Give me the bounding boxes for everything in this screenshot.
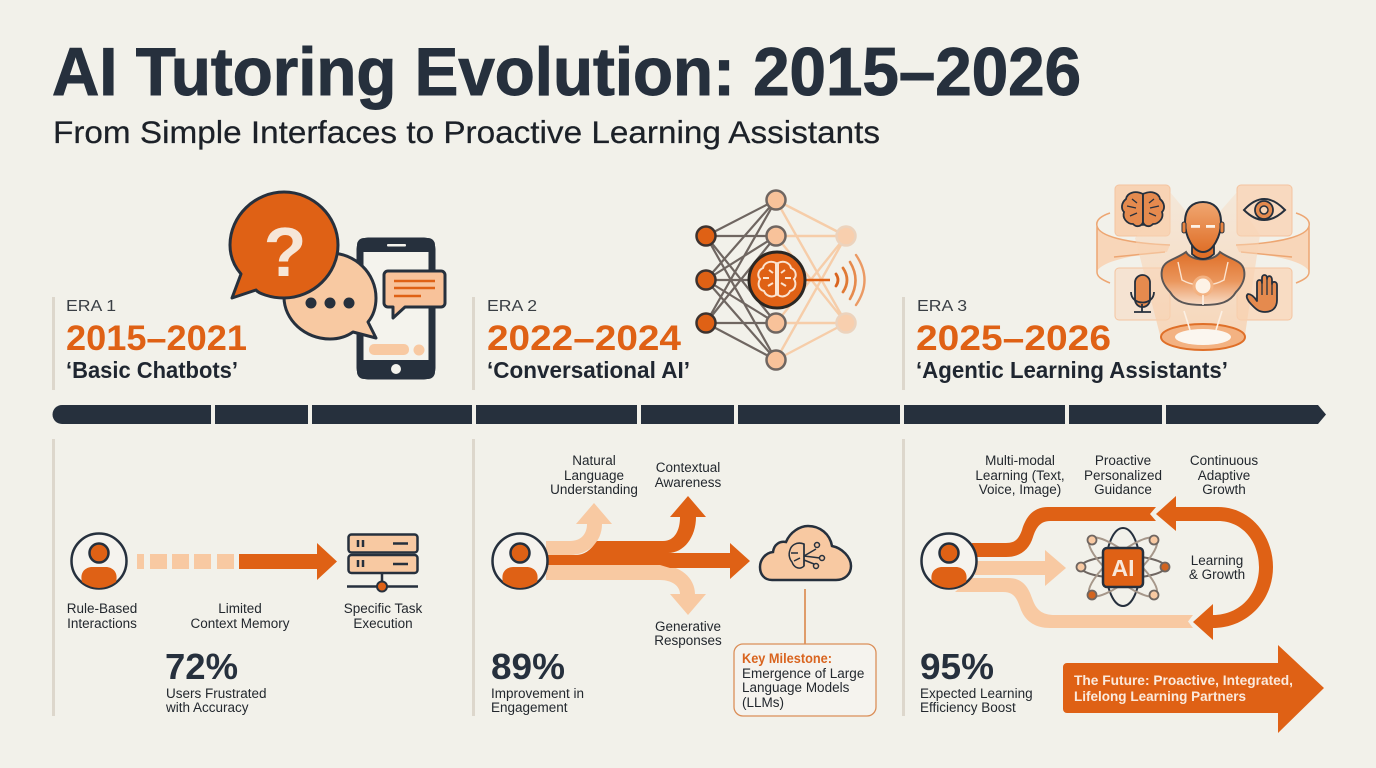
era 2 heading: ERA 2 (487, 298, 537, 315)
era 1 heading: 2015–2021 (66, 319, 247, 358)
icon: AI atom (1076, 528, 1170, 606)
labels: Limited (218, 601, 262, 616)
labels (975, 453, 1258, 582)
icon: chat bubbles and phone (230, 192, 445, 379)
era 3 heading: ERA 3 (917, 298, 967, 315)
stat: 72%: Users Frustrated (166, 686, 267, 701)
stat: 89%: Engagement (491, 700, 568, 715)
era 2 heading: 2022–2024 (487, 319, 682, 358)
connector line (804, 589, 806, 644)
icon: neural network with brain (696, 190, 864, 370)
labels (67, 601, 423, 631)
era 3 heading (916, 298, 1228, 383)
stat: 95%: Expected Learning (920, 686, 1033, 701)
stat: 89%: Improvement in (491, 686, 584, 701)
icon: user (922, 534, 976, 588)
labels: Voice, Image) (979, 482, 1061, 497)
labels: Rule-Based (67, 601, 137, 616)
subtitle: From Simple Interfaces to Proactive Learning Assistants (53, 114, 880, 150)
stat: 72% (165, 646, 267, 715)
panel: era 3 flow (920, 453, 1324, 733)
labels: Learning (1191, 553, 1243, 568)
icon: user (492, 534, 548, 588)
labels: Adaptive (1198, 468, 1250, 483)
era 2 heading (487, 298, 690, 383)
labels: Execution (353, 616, 413, 631)
timeline bar (52, 405, 1326, 424)
labels: Growth (1202, 482, 1246, 497)
stat: 95% (920, 646, 1033, 715)
icon: AI cloud (760, 526, 851, 580)
era 2 heading: ‘Conversational AI’ (487, 357, 690, 383)
title: AI Tutoring Evolution: 2015–2026 (52, 34, 1081, 110)
icon: agentic robot with modalities (1097, 185, 1309, 350)
labels: Understanding (550, 482, 638, 497)
labels: Responses (654, 633, 722, 648)
flow arrows (546, 496, 750, 615)
panel: era 1 flow (67, 534, 423, 715)
callout arrow: the future: The Future: Proactive, Integrated, (1074, 672, 1293, 688)
labels: & Growth (1189, 567, 1245, 582)
labels: Language (564, 468, 624, 483)
labels: Personalized (1084, 468, 1162, 483)
era 1 heading: ‘Basic Chatbots’ (66, 357, 238, 383)
callout arrow: the future: Lifelong Learning Partners (1074, 688, 1246, 704)
callout: key milestone: Emergence of Large (742, 666, 864, 681)
labels: Learning (Text, (975, 468, 1065, 483)
labels: Context Memory (190, 616, 290, 631)
icon: server (347, 534, 418, 592)
labels: Multi-modal (985, 453, 1055, 468)
stat: 95%: Efficiency Boost (920, 700, 1016, 715)
icon: AI atom: AI (1112, 555, 1134, 581)
stat: 89% (491, 646, 584, 715)
labels: Contextual (656, 460, 720, 475)
callout arrow: the future (1063, 645, 1324, 733)
labels: Natural (572, 453, 616, 468)
callout: key milestone: (LLMs) (742, 695, 784, 710)
stat: 72%: with Accuracy (165, 700, 249, 715)
labels: Awareness (655, 475, 722, 490)
stat: 95%: 95% (920, 646, 994, 687)
labels: Guidance (1094, 482, 1152, 497)
labels: Interactions (67, 616, 137, 631)
labels: Specific Task (344, 601, 423, 616)
era dividers (52, 297, 905, 716)
era 1 heading: ERA 1 (66, 298, 116, 315)
era 3 heading: ‘Agentic Learning Assistants’ (916, 357, 1228, 383)
callout: key milestone: Language Models (742, 680, 850, 695)
flow arrows (955, 496, 1273, 640)
callout: key milestone (734, 644, 876, 716)
dashed arrow (137, 543, 337, 580)
labels: Continuous (1190, 453, 1258, 468)
stat: 72%: 72% (165, 646, 238, 687)
era 1 heading (66, 298, 247, 383)
icon: user (72, 534, 126, 588)
panel: era 2 flow (491, 453, 876, 716)
labels (550, 453, 722, 648)
icon: chat bubbles and phone: ? (264, 213, 306, 291)
stat: 89%: 89% (491, 646, 565, 687)
callout: key milestone: Key Milestone: (742, 651, 832, 666)
labels: Proactive (1095, 453, 1151, 468)
era 3 heading: 2025–2026 (916, 319, 1111, 358)
labels: Generative (655, 619, 721, 634)
